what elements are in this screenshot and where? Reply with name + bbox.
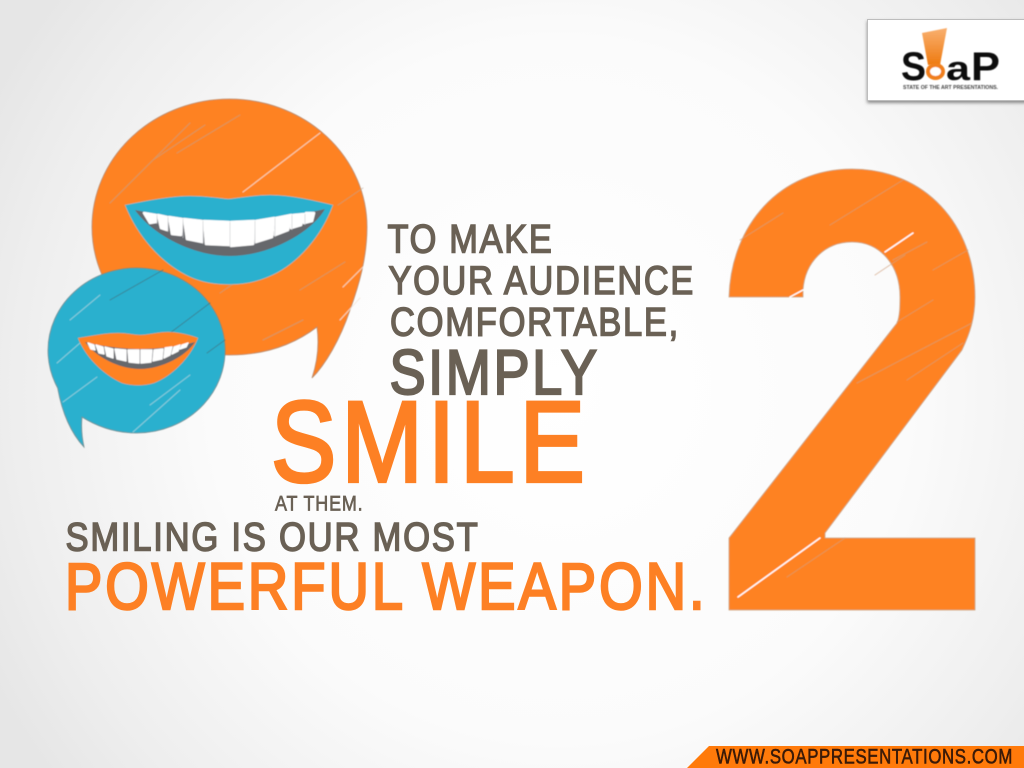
logo wordmark: S xyxy=(901,45,926,89)
scratches on teal bubble xyxy=(57,270,225,432)
logo exclamation mark xyxy=(922,28,947,65)
text: at them: AT THEM. xyxy=(275,493,364,516)
scratches on number xyxy=(738,180,972,597)
logo card xyxy=(868,20,1024,100)
small mouth: dark gum xyxy=(85,342,195,369)
logo wordmark xyxy=(901,45,1000,89)
text: smiling is our most: SMILING IS OUR MOST xyxy=(66,516,480,560)
mouth: teal lips xyxy=(125,195,333,284)
text: to make: TO MAKE xyxy=(388,217,554,261)
text: smile: SMILE xyxy=(271,378,590,506)
icon: orange speech bubble with smile xyxy=(92,99,367,378)
small teeth xyxy=(88,343,188,363)
scratches on orange bubble xyxy=(110,115,363,340)
icon: teal speech bubble with smile xyxy=(48,268,225,447)
text: powerful weapon: POWERFUL WEAPON. xyxy=(65,549,708,623)
text: your audience: YOUR AUDIENCE xyxy=(388,259,695,303)
tooth separators xyxy=(157,214,305,247)
logo wordmark: a xyxy=(946,50,971,88)
big number 2 xyxy=(729,169,975,610)
small mouth: orange lips xyxy=(78,332,198,385)
text: simply: SIMPLY xyxy=(390,338,600,408)
footer banner xyxy=(687,746,1024,768)
teeth xyxy=(144,213,314,246)
logo tagline: STATE OF THE ART PRESENTATIONS. xyxy=(903,85,998,91)
logo wordmark: P xyxy=(971,45,1000,89)
text: comfortable: COMFORTABLE, xyxy=(390,301,680,345)
mouth: dark gum xyxy=(135,209,325,256)
